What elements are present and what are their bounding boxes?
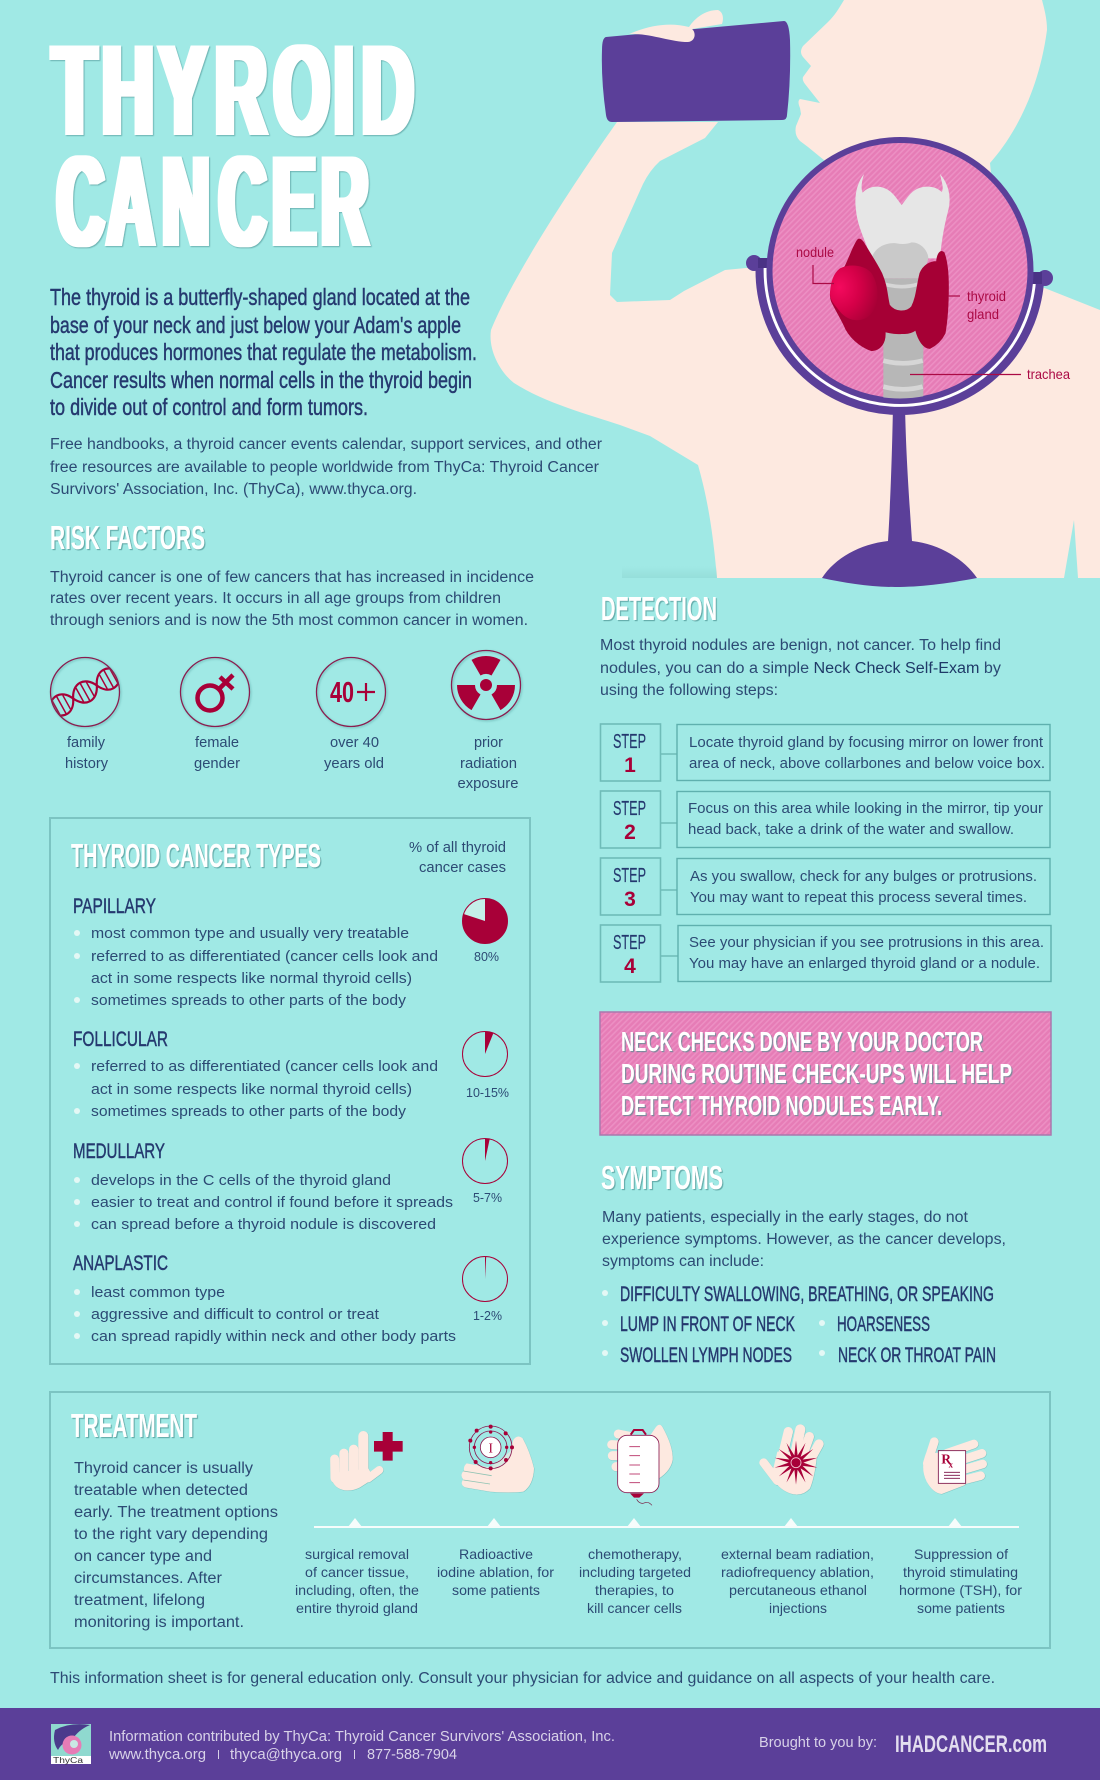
icon: radiation: radiation: [460, 755, 517, 772]
trachea: [883, 330, 923, 400]
treatment text: early. The treatment options: [74, 1504, 278, 1521]
type: follicular: sometimes spreads to other parts of the body: [91, 1103, 407, 1120]
resources text: Survivors' Association, Inc. (ThyCa), www.thyca.org.: [50, 481, 417, 498]
caption: surgery: including, often, the: [295, 1582, 419, 1598]
type: follicular: [73, 1027, 509, 1120]
mirror glass: [772, 142, 1028, 399]
caption: radiation: radiofrequency ablation,: [721, 1564, 874, 1580]
type: medullary: MEDULLARY: [73, 1139, 165, 1163]
caption: radiation: external beam radiation,: [721, 1546, 874, 1562]
step 3: [600, 858, 1050, 915]
pie: 80%: [462, 898, 508, 964]
label: nodule: nodule: [796, 244, 834, 260]
detection text: nodules, you can do a simple Neck Check Self-Exam by: [600, 660, 1001, 677]
logo: ThyCa: [51, 1724, 91, 1765]
symptoms text: Many patients, especially in the early stages, do not: [602, 1209, 969, 1226]
caption: radioactive iodine: [437, 1546, 554, 1598]
caption: surgery: [295, 1546, 419, 1616]
label: thyroid gland: thyroid: [967, 288, 1006, 304]
icon: family history: [50, 656, 122, 771]
type: anaplastic: least common type: [91, 1284, 225, 1301]
detection text: [600, 637, 1001, 699]
caption: chemotherapy: including targeted: [579, 1564, 691, 1580]
step 1: [600, 724, 1050, 781]
symptoms list: LUMP IN FRONT OF NECK: [620, 1313, 795, 1336]
caption: surgery: entire thyroid gland: [296, 1600, 418, 1616]
label: thyroid gland: gland: [967, 306, 999, 322]
panel: thyroid cancer types: [50, 818, 530, 1364]
mirror: [746, 130, 1053, 410]
thyroid gland: [830, 239, 948, 351]
type: papillary: PAPILLARY: [73, 894, 156, 918]
cup: [602, 21, 790, 122]
footer contact text: www.thyca.org: [108, 1747, 206, 1763]
footer contact text: 877-588-7904: [367, 1747, 457, 1763]
risk factors text: through seniors and is now the 5th most common cancer in women.: [50, 612, 528, 629]
caption: hormone suppression: hormone (TSH), for: [899, 1582, 1022, 1598]
step 2: STEP: [613, 798, 646, 820]
footer: [0, 1708, 1100, 1780]
step 1: area of neck, above collarbones and below voice box.: [689, 755, 1045, 772]
treatment text: [74, 1460, 278, 1631]
intro text: The thyroid is a butterfly-shaped gland located at the: [50, 284, 470, 310]
footer contact text: [108, 1729, 615, 1763]
type: follicular: referred to as differentiated (cancer cells look and: [91, 1058, 438, 1075]
step 4: STEP: [613, 932, 646, 954]
nodule: [830, 266, 878, 320]
callout: neck checks: [600, 1012, 1051, 1135]
caption: hormone suppression: [899, 1546, 1022, 1616]
logo: ThyCa: ThyCa: [53, 1756, 84, 1765]
type: anaplastic: ANAPLASTIC: [73, 1251, 168, 1275]
cricoid: [872, 242, 928, 278]
icon: chemotherapy hand: [612, 1425, 673, 1505]
risk factors text: [50, 569, 534, 629]
step 1: STEP: [613, 731, 646, 753]
intro text: [50, 284, 477, 420]
heading: detection: DETECTION: [601, 590, 717, 627]
caption: chemotherapy: kill cancer cells: [587, 1600, 682, 1616]
step 1: Locate thyroid gland by focusing mirror on lower front: [689, 734, 1044, 751]
title: THYROID: [53, 19, 414, 164]
brought to you by: [759, 1731, 1047, 1758]
symptoms list: [602, 1283, 996, 1367]
type: medullary: easier to treat and control if found before it spreads: [91, 1194, 453, 1211]
treatment text: treatable when detected: [74, 1482, 248, 1499]
label: trachea: trachea: [1027, 366, 1070, 382]
step 1: 1: [624, 754, 636, 777]
type: papillary: act in some respects like normal thyroid cells): [91, 970, 412, 987]
icon: radiation: exposure: [458, 775, 518, 792]
heading: types: THYROID CANCER TYPES: [71, 837, 321, 874]
panel: risk factors: [36, 519, 534, 792]
icon: prescription hand: R: [941, 1451, 951, 1466]
symptoms text: [602, 1209, 1006, 1270]
pie: 5-7%: 5-7%: [473, 1190, 502, 1205]
step 4: You may have an enlarged thyroid gland or a nodule.: [689, 955, 1040, 972]
resources text: Free handbooks, a thyroid cancer events calendar, support services, and other: [50, 436, 602, 453]
mirror stand: [822, 405, 977, 587]
caption: chemotherapy: [579, 1546, 691, 1616]
panel: treatment: [50, 1392, 1050, 1648]
thyroid anatomy: [830, 174, 950, 400]
type: anaplastic: [73, 1251, 508, 1345]
caption: radiation: [721, 1546, 874, 1616]
step 2: Focus on this area while looking in the mirror, tip your: [688, 800, 1043, 817]
type: anaplastic: can spread rapidly within neck and other body parts: [91, 1328, 456, 1345]
symptoms list: NECK OR THROAT PAIN: [838, 1344, 996, 1367]
icon: radiation: prior: [474, 734, 503, 751]
caption: surgery: of cancer tissue,: [305, 1564, 409, 1580]
type: follicular: FOLLICULAR: [73, 1027, 168, 1051]
intro text: base of your neck and just below your Adam's apple: [50, 312, 461, 338]
type: anaplastic: aggressive and difficult to control or treat: [91, 1306, 380, 1323]
icon: family history: history: [65, 755, 108, 772]
type: medullary: develops in the C cells of the thyroid gland: [91, 1172, 391, 1189]
step 4: [600, 925, 1051, 982]
brought to you by: Brought to you by:: [759, 1735, 877, 1751]
caption: chemotherapy: chemotherapy,: [588, 1546, 682, 1562]
pie: 80%: 80%: [474, 949, 499, 964]
body silhouette: [491, 0, 1100, 578]
illustration: person drinking in front of mirror: [491, 0, 1100, 587]
footer contact text: thyca@thyca.org: [230, 1747, 342, 1763]
risk factors text: rates over recent years. It occurs in all age groups from children: [50, 590, 501, 607]
type: papillary: most common type and usually very treatable: [91, 925, 409, 942]
caption: chemotherapy: therapies, to: [595, 1582, 674, 1598]
icon: radioactive iodine hand: [461, 1425, 534, 1492]
type: follicular: act in some respects like normal thyroid cells): [91, 1081, 412, 1098]
step 4: 4: [624, 955, 636, 978]
caption: hormone suppression: Suppression of: [914, 1546, 1008, 1562]
treatment text: monitoring is important.: [74, 1614, 244, 1631]
symptoms text: experience symptoms. However, as the cancer develops,: [602, 1231, 1006, 1248]
icon: family history: family: [67, 734, 105, 751]
symptoms list: HOARSENESS: [837, 1313, 930, 1336]
heading: treatment: TREATMENT: [71, 1407, 197, 1444]
mirror cradle: [756, 268, 1044, 415]
pie: 5-7%: [462, 1138, 508, 1205]
pie: 1-2%: [462, 1256, 508, 1323]
caption: hormone suppression: thyroid stimulating: [903, 1564, 1018, 1580]
intro text: Cancer results when normal cells in the thyroid begin: [50, 367, 472, 393]
step 2: head back, take a drink of the water and swallow.: [688, 821, 1014, 838]
step 3: STEP: [613, 865, 646, 887]
icon: female gender: female: [195, 734, 239, 751]
treatment text: Thyroid cancer is usually: [74, 1460, 253, 1477]
icon: radiation hand: [764, 1429, 819, 1495]
icon: surgery hand: [331, 1432, 403, 1490]
detection text: using the following steps:: [600, 682, 778, 699]
type: papillary: sometimes spreads to other parts of the body: [91, 992, 407, 1009]
icon: over 40: years old: [324, 755, 384, 772]
hand on cup: [629, 10, 723, 42]
caption: radioactive iodine: iodine ablation, for: [437, 1564, 554, 1580]
symptoms list: SWOLLEN LYMPH NODES: [620, 1344, 792, 1367]
pie: 1-2%: 1-2%: [473, 1308, 502, 1323]
icon: over 40: 40: [330, 677, 354, 709]
intro text: that produces hormones that regulate the metabolism.: [50, 339, 477, 365]
pie: 10-15%: 10-15%: [466, 1085, 509, 1100]
step 2: [600, 791, 1050, 848]
type: papillary: [73, 894, 508, 1009]
disclaimer: This information sheet is for general education only. Consult your physician for advice and guidance on all aspects of your health care.: [50, 1670, 995, 1687]
step 3: You may want to repeat this process several times.: [690, 889, 1027, 906]
icon: female gender: [180, 658, 250, 772]
type: papillary: referred to as differentiated (cancer cells look and: [91, 948, 438, 965]
title: CANCER: [57, 128, 368, 274]
icon: radiation: [452, 650, 520, 792]
detection text: Most thyroid nodules are benign, not cancer. To help find: [600, 637, 1001, 654]
pie: 10-15%: [462, 1031, 509, 1100]
treatment text: treatment, lifelong: [74, 1592, 205, 1609]
icon: radioactive iodine hand: I: [488, 1440, 493, 1455]
treatment text: circumstances. After: [74, 1570, 222, 1587]
intro text: to divide out of control and form tumors.: [50, 394, 368, 420]
note: percent of cases: cancer cases: [419, 860, 506, 876]
note: percent of cases: % of all thyroid: [409, 840, 506, 856]
shadow at base of body: [622, 566, 717, 578]
symptoms text: symptoms can include:: [602, 1253, 764, 1270]
timeline: [314, 1518, 1019, 1528]
title: [53, 19, 414, 274]
knobs: [746, 255, 762, 271]
resources text: [50, 436, 602, 498]
step 3: As you swallow, check for any bulges or protrusions.: [690, 868, 1037, 885]
resources text: free resources are available to people worldwide from ThyCa: Thyroid Cancer: [50, 459, 599, 476]
label: thyroid gland: [948, 288, 1006, 322]
note: percent of cases: [409, 840, 506, 876]
caption: radioactive iodine: some patients: [452, 1582, 540, 1598]
icon: prescription hand: x: [949, 1460, 954, 1470]
treatment text: to the right vary depending: [74, 1526, 268, 1543]
caption: radiation: injections: [769, 1600, 827, 1616]
treatment text: on cancer type and: [74, 1548, 212, 1565]
heading: risk factors: RISK FACTORS: [50, 519, 205, 556]
label: nodule: [796, 244, 834, 284]
caption: hormone suppression: some patients: [917, 1600, 1005, 1616]
icon: female gender: gender: [194, 755, 240, 772]
caption: radiation: percutaneous ethanol: [729, 1582, 867, 1598]
footer contact text: Information contributed by ThyCa: Thyroid Cancer Survivors' Association, Inc.: [109, 1729, 615, 1745]
step 2: 2: [624, 821, 636, 844]
risk factors text: Thyroid cancer is one of few cancers that has increased in incidence: [50, 569, 534, 586]
panel: symptoms: [601, 1159, 1006, 1367]
type: medullary: [73, 1138, 508, 1233]
icon: over 40: over 40: [330, 734, 379, 751]
icon: over 40: [316, 658, 386, 772]
step 3: 3: [624, 888, 636, 911]
thyroid cartilage: [855, 174, 950, 258]
caption: surgery: surgical removal: [305, 1546, 409, 1562]
panel: detection: [600, 590, 1051, 982]
step 4: See your physician if you see protrusions in this area.: [689, 934, 1044, 951]
heading: symptoms: SYMPTOMS: [601, 1159, 723, 1196]
caption: radioactive iodine: Radioactive: [459, 1546, 533, 1562]
icon: prescription hand: [923, 1442, 983, 1494]
type: medullary: can spread before a thyroid nodule is discovered: [91, 1216, 436, 1233]
